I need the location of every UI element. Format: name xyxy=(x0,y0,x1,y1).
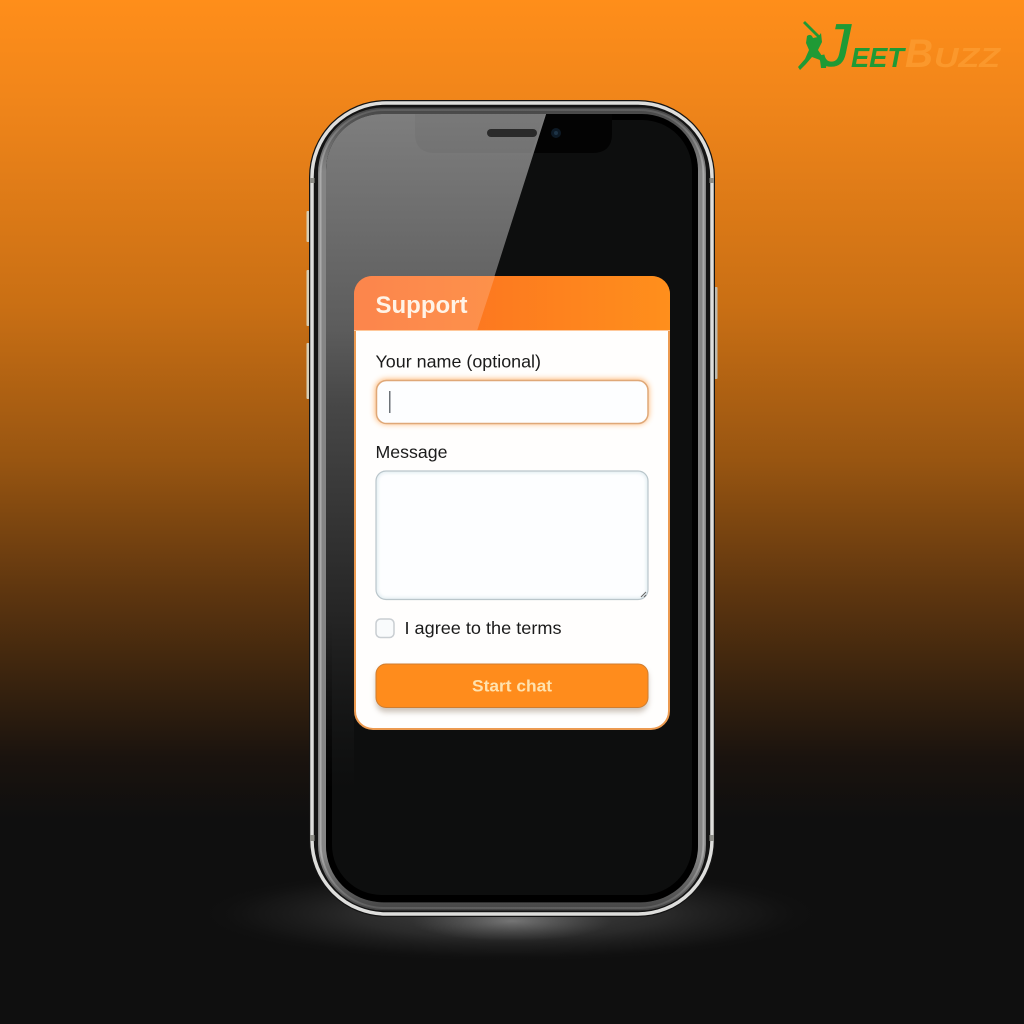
notch xyxy=(415,114,612,153)
card body xyxy=(355,277,669,729)
card header xyxy=(354,276,670,332)
button: start chat xyxy=(376,664,648,712)
logo: JeetBuzz: EET xyxy=(851,42,907,73)
icon: cricket player xyxy=(798,21,827,70)
support form card xyxy=(354,276,670,729)
logo: JeetBuzz: UZZ xyxy=(934,42,1001,73)
floor glow under phone xyxy=(198,866,822,962)
input: name xyxy=(375,379,649,424)
logo word: Jeet: J xyxy=(818,12,852,79)
metal frame xyxy=(309,100,715,917)
side buttons xyxy=(306,211,718,399)
screen xyxy=(332,120,692,895)
checkbox xyxy=(376,619,394,638)
textarea: message xyxy=(376,471,648,600)
label: your name: Your name (optional) xyxy=(376,352,541,372)
screen bezel xyxy=(326,114,698,902)
camera xyxy=(551,128,561,138)
heading: Support: Support xyxy=(376,292,468,319)
button: start chat: Start chat xyxy=(472,678,553,696)
phone xyxy=(306,100,718,917)
logo: JeetBuzz xyxy=(798,12,1001,79)
speaker xyxy=(487,129,537,137)
label: message: Message xyxy=(376,442,448,462)
logo word: Buzz: B xyxy=(905,32,933,76)
frame seams xyxy=(310,178,714,841)
glass reflection xyxy=(326,114,546,742)
checkbox label: I agree to the terms xyxy=(404,618,562,638)
